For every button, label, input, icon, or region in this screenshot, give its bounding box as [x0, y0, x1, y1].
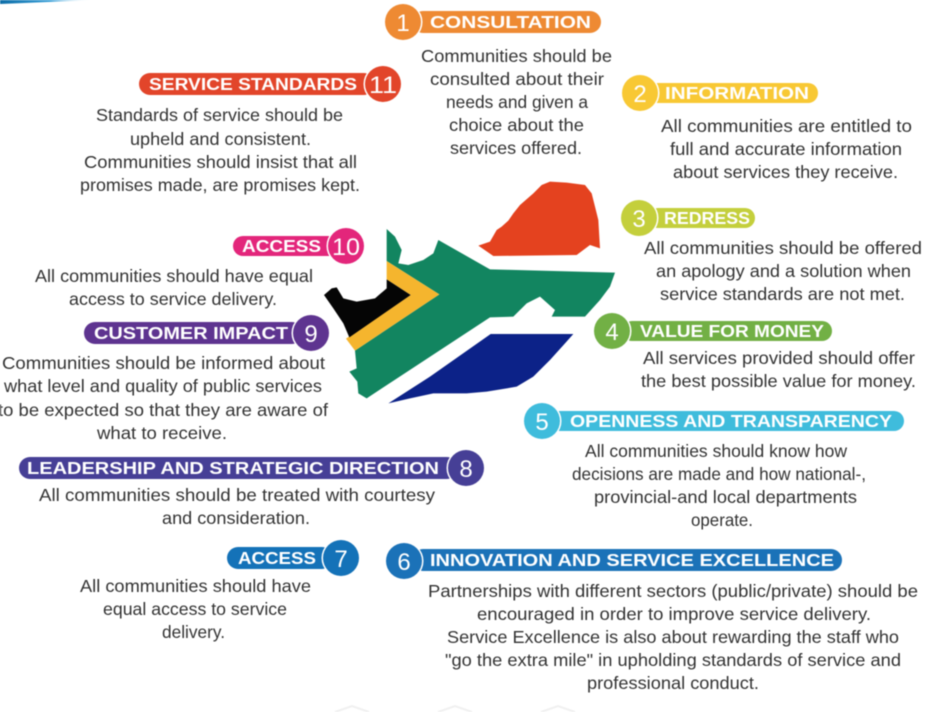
map piece: blue — [388, 334, 573, 403]
body text 5: decisions are made and how national-, — [572, 464, 866, 484]
body text 5: operate. — [691, 510, 753, 530]
body text 1: needs and given a — [446, 92, 588, 112]
panel: 1 consultation — [384, 2, 612, 158]
badge 3: 3 — [632, 206, 646, 233]
badge 5: OPENNESS AND TRANSPARENCY — [570, 411, 892, 431]
body text 10: All communities should have equal — [35, 266, 313, 286]
body text 3: All communities should be offered — [644, 238, 922, 258]
badge 6 — [384, 542, 842, 580]
panel: 11 service standards — [80, 64, 402, 195]
panel: 2 information — [620, 74, 912, 182]
body text 2: full and accurate information — [670, 139, 902, 159]
body text 6: Partnerships with different sectors (public/private) should be — [428, 581, 918, 601]
badge 3 — [620, 198, 755, 238]
badge 9 — [84, 314, 330, 352]
badge 4: 4 — [605, 319, 619, 346]
body text 3: service standards are not met. — [660, 284, 905, 304]
badge 3: REDRESS — [664, 208, 750, 228]
badge 5 — [522, 402, 904, 440]
body text 8: All communities should be treated with courtesy — [39, 485, 435, 505]
body text 6: "go the extra mile" in upholding standards of service and — [445, 650, 901, 670]
body text 2: about services they receive. — [673, 162, 898, 182]
badge 10: ACCESS — [242, 236, 321, 256]
body text 3: an apology and a solution when — [656, 261, 911, 281]
body text 9: Communities should be informed about — [2, 353, 325, 373]
body text 1: Communities should be — [421, 46, 612, 66]
map piece: green — [349, 229, 615, 398]
badge 1 — [384, 2, 601, 42]
body text 1: services offered. — [450, 138, 582, 158]
badge 9: CUSTOMER IMPACT — [94, 323, 288, 343]
panel: 7 access — [80, 538, 360, 642]
badge 9: 9 — [304, 321, 318, 348]
body text 8 — [39, 485, 435, 528]
body text 6: encouraged in order to improve service delivery. — [477, 604, 871, 624]
badge 11: 11 — [369, 72, 397, 99]
badge 10 — [233, 226, 366, 266]
body text 2: All communities are entitled to — [661, 116, 912, 136]
badge 4 — [592, 312, 832, 350]
body text 6: professional conduct. — [587, 673, 759, 693]
body text 11: promises made, are promises kept. — [80, 175, 360, 195]
body text 1: choice about the — [449, 115, 584, 135]
panel: 10 access — [35, 226, 366, 309]
body text 11 — [80, 105, 360, 195]
body text 10: access to service delivery. — [69, 289, 277, 309]
panel: 9 customer impact — [0, 314, 330, 443]
badge 7 — [227, 538, 360, 578]
body text 2 — [661, 116, 912, 182]
badge 10: 10 — [332, 234, 360, 261]
body text 4: All services provided should offer — [643, 348, 915, 368]
body text 7: delivery. — [162, 622, 225, 642]
decorative faint hexagon tops at bottom edge — [335, 706, 575, 712]
badge 6: 6 — [397, 549, 411, 576]
badge 6: INNOVATION AND SERVICE EXCELLENCE — [430, 550, 834, 570]
body text 11: upheld and consistent. — [130, 129, 311, 149]
badge 2: 2 — [633, 81, 647, 108]
body text 11: Communities should insist that all — [84, 152, 357, 172]
panel: 4 value for money — [592, 312, 916, 391]
map: South Africa flag — [324, 182, 615, 403]
badge 1: CONSULTATION — [430, 12, 591, 32]
body text 5 — [572, 441, 866, 530]
body text 9: what level and quality of public services — [3, 376, 322, 396]
badge 1: 1 — [396, 10, 410, 37]
badge 2 — [620, 74, 818, 112]
map piece: yellow — [346, 261, 439, 351]
map piece: black — [324, 279, 411, 337]
body text 7: equal access to service — [103, 599, 287, 619]
body text 6: Service Excellence is also about rewarding the staff who — [447, 627, 899, 647]
body text 3 — [644, 238, 922, 304]
body text 4: the best possible value for money. — [641, 371, 916, 391]
body text 9 — [0, 353, 328, 443]
body text 8: and consideration. — [162, 508, 310, 528]
badge 7: ACCESS — [238, 548, 316, 568]
badge 8: 8 — [459, 456, 473, 483]
decorative top-left streak — [0, 0, 92, 4]
badge 2: INFORMATION — [665, 83, 809, 103]
body text 1 — [421, 46, 612, 158]
panel: 8 leadership and strategic direction — [19, 448, 486, 528]
badge 8 — [19, 448, 486, 488]
body text 5: All communities should know how — [585, 441, 847, 461]
body text 7: All communities should have — [80, 576, 311, 596]
body text 1: consulted about their — [430, 69, 604, 89]
body text 11: Standards of service should be — [96, 105, 343, 125]
panel: 3 redress — [620, 198, 922, 304]
body text 6 — [428, 581, 918, 693]
badge 8: LEADERSHIP AND STRATEGIC DIRECTION — [27, 458, 439, 478]
panel: 6 innovation and service excellence — [384, 542, 918, 693]
body text 7 — [80, 576, 311, 642]
body text 5: provincial-and local departments — [594, 487, 857, 507]
body text 9: what to receive. — [96, 423, 227, 443]
badge 11 — [139, 64, 402, 104]
badge 5: 5 — [535, 409, 549, 436]
map piece: red — [478, 182, 600, 256]
badge 7: 7 — [334, 546, 348, 573]
body text 9: to be expected so that they are aware of — [0, 400, 328, 420]
body text 4 — [641, 348, 916, 391]
body text 10 — [35, 266, 313, 309]
badge 11: SERVICE STANDARDS — [149, 74, 357, 94]
panel: 5 openness and transparency — [522, 402, 904, 530]
badge 4: VALUE FOR MONEY — [640, 321, 824, 341]
